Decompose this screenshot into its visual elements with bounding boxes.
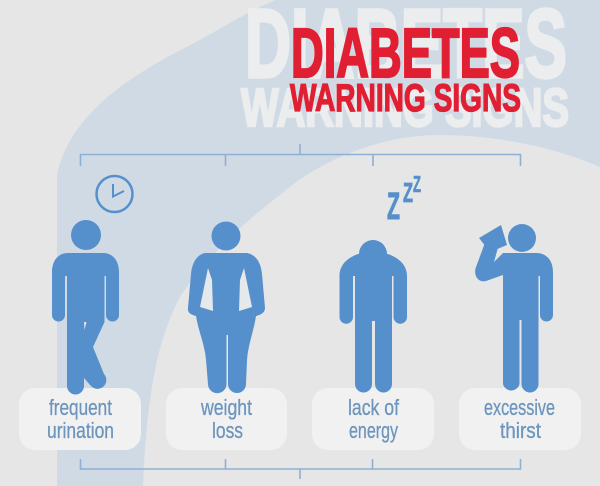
title [290, 14, 521, 120]
label: frequent urination: frequent [49, 395, 112, 420]
figure: excessive thirst [475, 224, 553, 392]
label: lack of energy: lack of [348, 395, 400, 420]
label: excessive thirst: excessive [484, 395, 555, 420]
icon: zzz [387, 171, 421, 228]
ghost title [241, 0, 569, 138]
label: lack of energy: energy [349, 418, 398, 443]
label: frequent urination [19, 388, 141, 450]
label: frequent urination: urination [47, 418, 114, 443]
label: weight loss [166, 388, 287, 450]
figure: lack of energy [340, 240, 407, 392]
icon: zzz: Z [387, 186, 400, 228]
label: excessive thirst [459, 388, 581, 450]
figure: weight loss [188, 222, 265, 393]
top bracket [80, 144, 520, 166]
figure: frequent urination [52, 220, 119, 394]
bottom bracket [80, 459, 520, 479]
label: excessive thirst: thirst [500, 418, 541, 443]
icon: zzz: Z [403, 177, 413, 208]
icon: clock [96, 176, 132, 212]
label: weight loss: weight [200, 395, 252, 420]
label: weight loss: loss [212, 418, 243, 443]
icon: zzz: Z [413, 171, 421, 197]
label: lack of energy [312, 388, 434, 450]
